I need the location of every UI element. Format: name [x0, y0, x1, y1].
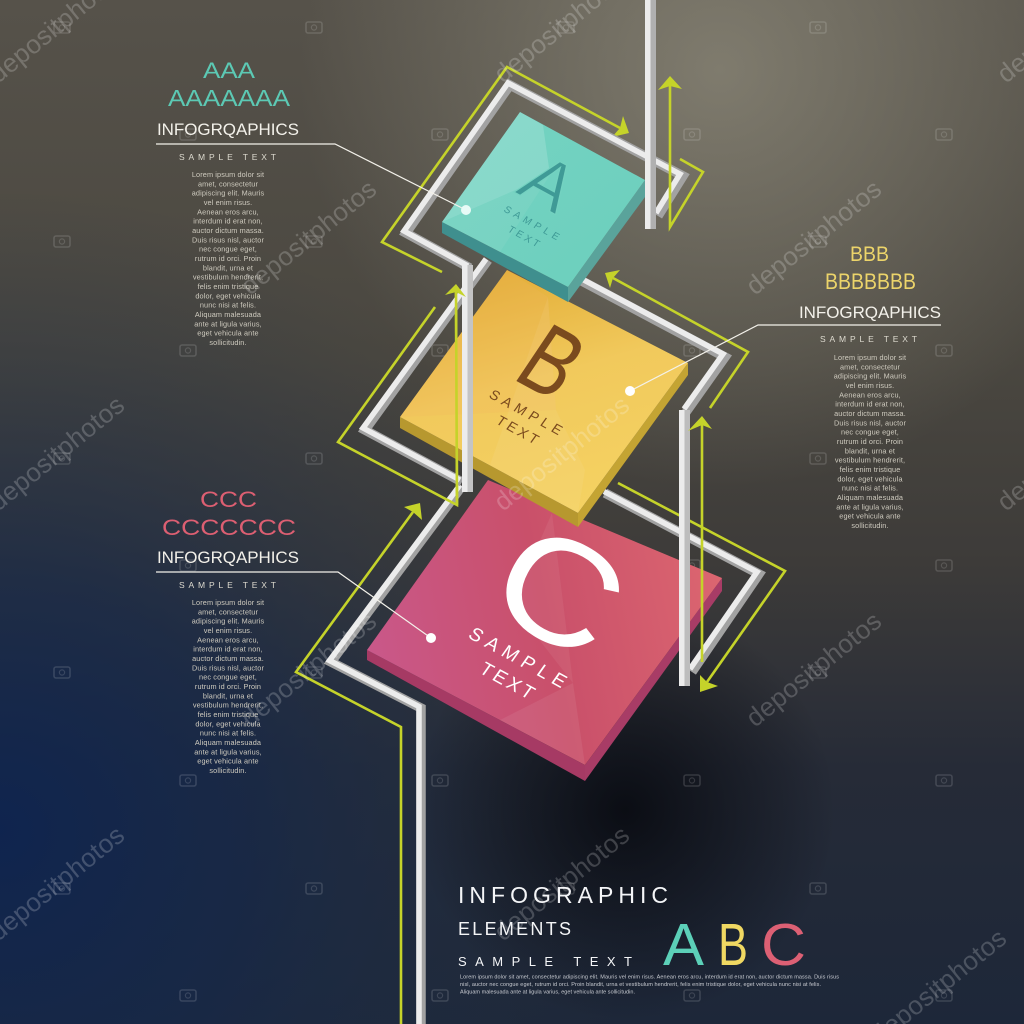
block A leader line [156, 144, 466, 210]
block B text: BBBBBBB [825, 269, 916, 294]
block A paragraph: ante at ligula varius, [194, 319, 262, 328]
block C paragraph: ante at ligula varius, [194, 747, 262, 756]
block C text [156, 487, 436, 775]
block A paragraph: Lorem ipsum dolor sit [192, 170, 264, 179]
block A paragraph: blandit, urna et [203, 263, 253, 272]
watermark text: depositphotos [235, 174, 382, 301]
block A paragraph: Duis risus nisl, auctor [192, 235, 264, 244]
block B paragraph: interdum id erat non, [835, 400, 905, 409]
block A paragraph: sollicitudin. [209, 338, 247, 347]
block C paragraph: Lorem ipsum dolor sit [192, 598, 264, 607]
card C [367, 480, 722, 781]
block B paragraph: auctor dictum massa. [834, 409, 906, 418]
main title: INFOGRAPHIC [458, 882, 668, 908]
block B paragraph: amet, consectetur [840, 362, 900, 371]
card A sample text: SAMPLE [501, 204, 562, 243]
block C paragraph: nec congue eget, [199, 673, 257, 682]
block B paragraph: eget vehicula ante [839, 512, 901, 521]
block C paragraph: blandit, urna et [203, 691, 253, 700]
big letters ABC: B [718, 912, 748, 978]
block A paragraph: nunc nisi at felis. [200, 301, 256, 310]
block C paragraph: sollicitudin. [209, 766, 247, 775]
block A paragraph: nec congue eget, [199, 245, 257, 254]
pipe: top [645, 0, 656, 229]
block B paragraph: Lorem ipsum dolor sit [834, 353, 906, 362]
bottom title block [458, 882, 839, 996]
block B text [625, 243, 941, 530]
block C dot [426, 633, 436, 643]
arrow lines in front of cards [445, 76, 712, 662]
watermark text: depositphotos [488, 820, 635, 947]
block A title: INFOGRQAPHICS [157, 120, 299, 139]
block B dot [625, 386, 635, 396]
paragraph [460, 974, 839, 996]
block C paragraph: Aliquam malesuada [195, 738, 262, 747]
block C paragraph: amet, consectetur [198, 607, 258, 616]
card B [400, 270, 688, 527]
block B title: INFOGRQAPHICS [799, 303, 941, 322]
block B paragraph: blandit, urna et [845, 446, 895, 455]
block A dot [461, 205, 471, 215]
card B sides [400, 417, 578, 527]
paragraph: nisl, auctor nec congue eget, rutrum id orci. Proin blandit, urna et vestibulum hendrerit, felis enim tristique dolor, eget vehicula nunc nisi at felis. [460, 982, 821, 988]
block C paragraph: eget vehicula ante [197, 757, 259, 766]
block C paragraph: nunc nisi at felis. [200, 729, 256, 738]
arrow: top right [670, 86, 703, 227]
card A [442, 112, 645, 302]
block A paragraph: auctor dictum massa. [192, 226, 264, 235]
block C subtitle: SAMPLE TEXT [179, 580, 276, 590]
block C heading: CCC [200, 487, 257, 512]
block A paragraph: felis enim tristique [198, 282, 258, 291]
subtitle: ELEMENTS [458, 919, 571, 939]
block B heading: BBB [850, 243, 889, 266]
block C paragraph: dolor, eget vehicula [195, 719, 261, 728]
block B paragraph: Aliquam malesuada [837, 493, 904, 502]
vertical pipes in front of cards [462, 0, 690, 686]
block A paragraph: dolor, eget vehicula [195, 291, 261, 300]
block C title: INFOGRQAPHICS [157, 548, 299, 567]
card A: TEXT [505, 224, 542, 250]
block A paragraph: vel enim risus. [204, 198, 252, 207]
block C paragraph: vel enim risus. [204, 626, 252, 635]
card A top face [442, 112, 645, 287]
block A paragraph: interdum id erat non, [193, 217, 263, 226]
big letters ABC: A [663, 912, 705, 978]
paragraph: Lorem ipsum dolor sit amet, consectetur adipiscing elit. Mauris vel enim risus. Aenean eros arcu, interdum id erat non, auctor dictum massa. Duis risus [460, 974, 839, 980]
block C paragraph: rutrum id orci. Proin [195, 682, 261, 691]
lower frame: yellow guide lines and C ring [296, 483, 785, 1024]
arrow: right [701, 425, 703, 662]
block B paragraph: Aenean eros arcu, [839, 390, 901, 399]
block A paragraph: Aenean eros arcu, [197, 207, 259, 216]
pipe: right [679, 410, 690, 686]
card B: TEXT [493, 412, 542, 447]
block C paragraph: Aenean eros arcu, [197, 635, 259, 644]
block A paragraph: adipiscing elit. Mauris [192, 189, 264, 198]
block C paragraph: auctor dictum massa. [192, 654, 264, 663]
block B paragraph: felis enim tristique [840, 465, 900, 474]
block A subtitle: SAMPLE TEXT [179, 152, 276, 162]
pipe: A to C [462, 265, 473, 492]
block C paragraph: interdum id erat non, [193, 645, 263, 654]
card C sides [367, 650, 585, 781]
block A paragraph: eget vehicula ante [197, 329, 259, 338]
block B paragraph: vel enim risus. [846, 381, 894, 390]
big letters ABC: C [761, 912, 806, 978]
block B leader line [630, 325, 941, 391]
block A text [156, 58, 471, 347]
block A paragraph: amet, consectetur [198, 179, 258, 188]
block A heading: AAA [203, 58, 255, 83]
block B paragraph: rutrum id orci. Proin [837, 437, 903, 446]
arrow: middle left [456, 292, 457, 505]
card A letter: A [505, 141, 593, 228]
watermark text: depositphotos [740, 606, 887, 733]
block C paragraph [192, 598, 264, 775]
block C leader line [156, 572, 431, 638]
card C sample text: SAMPLE [464, 624, 570, 692]
block B paragraph: nec congue eget, [841, 428, 899, 437]
block B paragraph: dolor, eget vehicula [837, 474, 903, 483]
block B subtitle: SAMPLE TEXT [820, 334, 917, 344]
block C paragraph: vestibulum hendrerit, [193, 701, 263, 710]
watermark text: depositphotos [740, 174, 887, 301]
card C: TEXT [475, 659, 539, 704]
card B sample text: SAMPLE [486, 386, 566, 438]
block B paragraph: vestibulum hendrerit, [835, 456, 905, 465]
block C paragraph: felis enim tristique [198, 710, 258, 719]
card C letter: C [467, 490, 652, 692]
block B paragraph: nunc nisi at felis. [842, 484, 898, 493]
block B paragraph [834, 353, 906, 530]
block A paragraph: Aliquam malesuada [195, 310, 262, 319]
block B paragraph: adipiscing elit. Mauris [834, 372, 906, 381]
block A paragraph: rutrum id orci. Proin [195, 254, 261, 263]
block B paragraph: sollicitudin. [851, 521, 889, 530]
block B paragraph: Duis risus nisl, auctor [834, 418, 906, 427]
block A paragraph [192, 170, 264, 347]
paragraph: Aliquam malesuada ante at ligula varius, eget vehicula ante sollicitudin. [460, 990, 635, 996]
block C paragraph: adipiscing elit. Mauris [192, 617, 264, 626]
sample text: SAMPLE TEXT [458, 954, 632, 969]
top frame: yellow guide lines and A ring [382, 67, 683, 272]
block A text: AAAAAAA [168, 85, 291, 111]
block A paragraph: vestibulum hendrerit, [193, 273, 263, 282]
big letters ABC [663, 912, 806, 978]
card C top face [367, 480, 722, 765]
watermark text: depositphotos [235, 606, 382, 733]
watermark text: depositphotos [488, 390, 635, 517]
card B top face [400, 270, 688, 513]
block B paragraph: ante at ligula varius, [836, 502, 904, 511]
block C paragraph: Duis risus nisl, auctor [192, 663, 264, 672]
card B letter: B [499, 304, 605, 420]
card A sides [442, 222, 568, 302]
block C text: CCCCCCC [162, 515, 296, 540]
middle frame: yellow guide lines and B ring [338, 259, 748, 505]
